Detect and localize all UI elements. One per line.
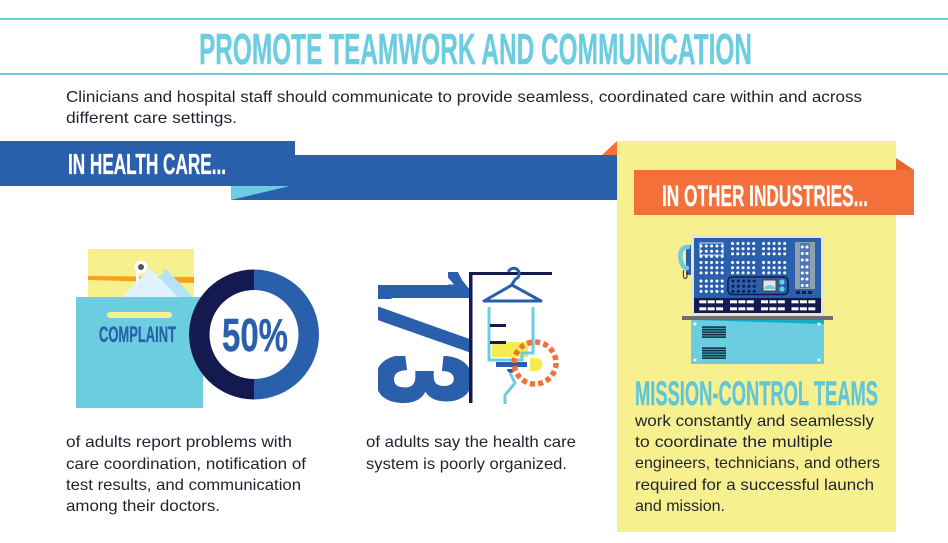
banner: in health care — [0, 141, 617, 200]
hanger — [484, 268, 541, 301]
banner heading: IN HEALTH CARE... — [68, 149, 226, 181]
intro text: Clinicians and hospital staff should communicate to provide seamless, coordinated care within and across — [66, 89, 862, 106]
text: mission control description: required for a successful launch — [635, 477, 874, 494]
text: mission control description: work constantly and seamlessly — [634, 413, 874, 430]
text: poorly organized: of adults say the health care — [366, 434, 576, 451]
text: poorly organized — [366, 434, 576, 473]
folder label: COMPLAINT — [99, 322, 176, 347]
text: care coordination: of adults report problems with — [66, 434, 292, 451]
stat: 1/3: / — [350, 306, 499, 354]
intro text: different care settings. — [66, 110, 237, 127]
IV bag — [489, 307, 556, 404]
intro text — [66, 89, 862, 127]
text: care coordination: among their doctors. — [66, 498, 220, 515]
panel: other industries — [617, 141, 914, 532]
text: poorly organized: system is poorly organized. — [366, 456, 567, 473]
text: care coordination: test results, and communication — [66, 477, 301, 494]
orange banner — [634, 158, 914, 215]
text: care coordination: care coordination, notification of — [66, 456, 307, 473]
stat: 1/3: 1 — [350, 262, 499, 316]
text: mission control description: engineers, technicians, and others — [635, 455, 880, 472]
text: mission control description: and mission. — [635, 498, 725, 515]
text: mission control description — [634, 413, 880, 515]
text: care coordination — [66, 434, 307, 515]
icon: complaint folder with donut — [76, 249, 319, 408]
stat: 1/3: 3 — [351, 354, 497, 405]
stat: 1/3 — [378, 272, 469, 404]
icon: mission control console — [680, 235, 833, 364]
icon: phone — [680, 245, 691, 278]
donut chart: 50%: 50% — [222, 309, 288, 361]
donut chart: 50% — [189, 270, 319, 400]
icon: one third with IV bag — [378, 266, 559, 404]
text: mission control description: to coordinate the multiple — [635, 434, 833, 451]
